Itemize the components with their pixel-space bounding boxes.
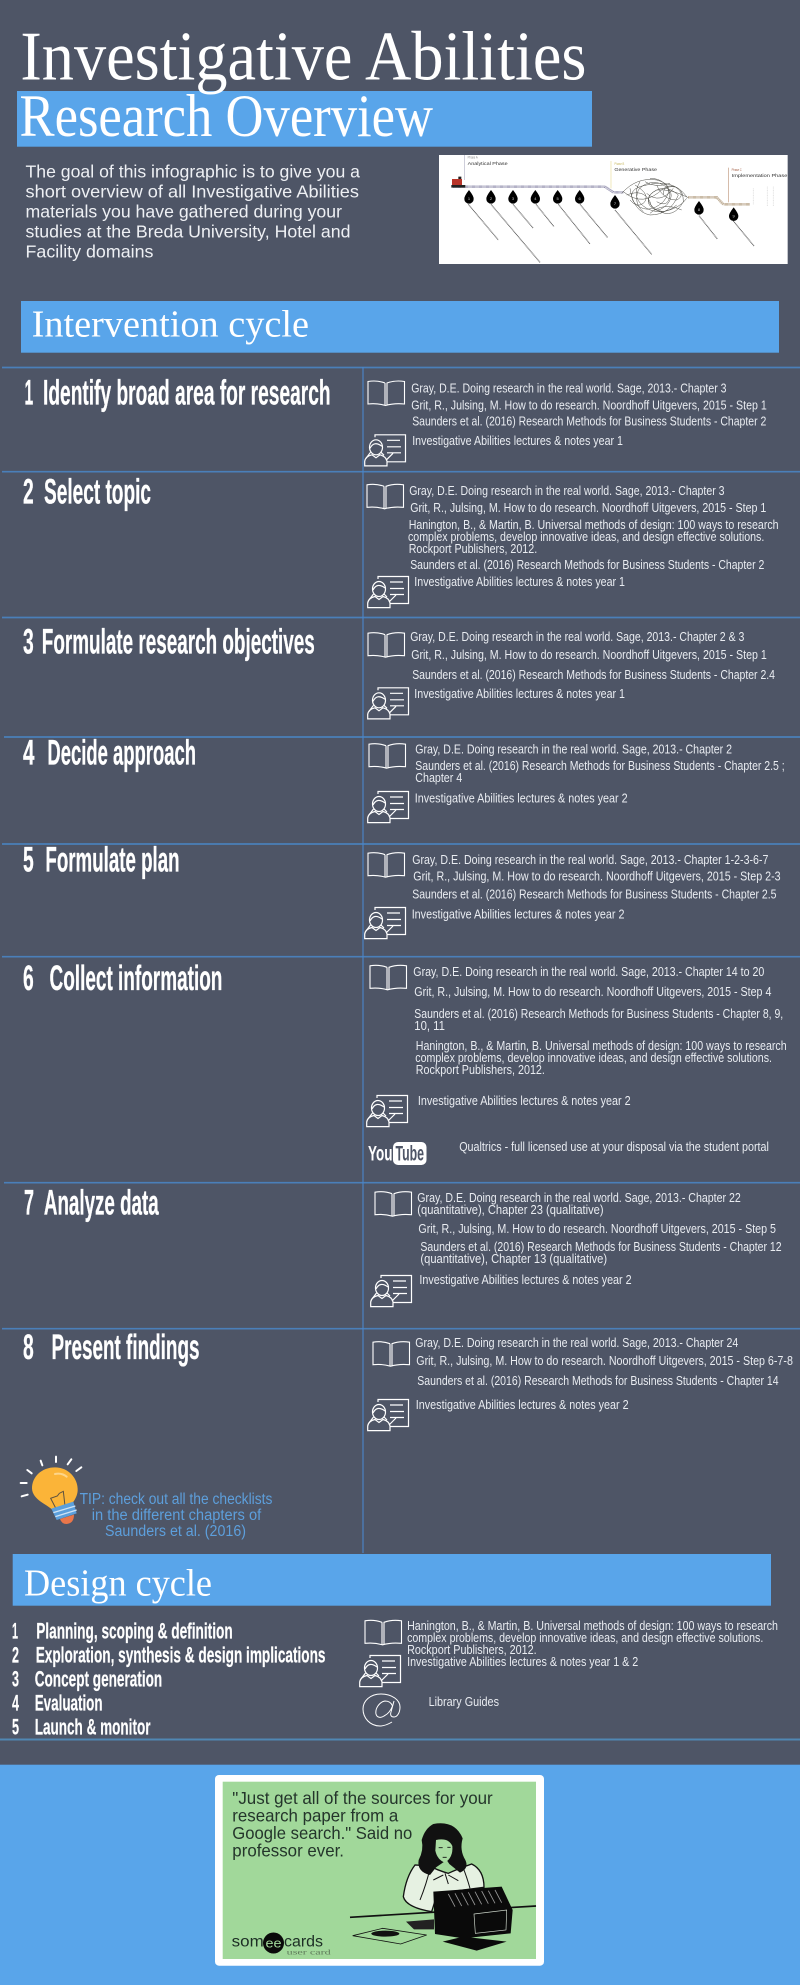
icon: youtube logo: You [368, 1143, 392, 1166]
design cycle steps list: Planning, scoping & definition [36, 1618, 233, 1643]
step 6 heading: 6 [23, 959, 34, 998]
step 5 [23, 841, 781, 939]
step 8 book sources: Gray, D.E. Doing research in the real world. Sage, 2013.- Chapter 24 [415, 1335, 738, 1350]
diagram: design process train track: 6 [579, 196, 582, 201]
step 6 lecture notes: Investigative Abilities lectures & notes year 2 [418, 1093, 631, 1108]
subtitle: Research Overview [20, 83, 434, 149]
step 7 book sources: (quantitative), Chapter 13 (qualitative) [420, 1251, 607, 1266]
icon: book [365, 1620, 402, 1645]
step 1 book sources [411, 380, 767, 428]
someecards logo: ee [266, 1936, 282, 1950]
step 6 book sources: Rockport Publishers, 2012. [416, 1062, 545, 1077]
tip callout: in the different chapters of [92, 1507, 262, 1524]
diagram: design process train track: Phase C [732, 168, 742, 172]
card quote: research paper from a [232, 1805, 399, 1825]
step 3 book sources [410, 629, 775, 682]
step 6 [23, 959, 787, 1166]
diagram: design process train track: 3 [512, 196, 515, 201]
design cycle steps list: Concept generation [35, 1666, 162, 1691]
card quote [232, 1788, 493, 1861]
intro paragraph: The goal of this infographic is to give you a [26, 162, 360, 182]
icon: light bulb [21, 1457, 81, 1524]
intro paragraph: materials you have gathered during your [26, 202, 342, 222]
diagram: design process train track: 8 [698, 207, 701, 212]
step 5 lecture notes: Investigative Abilities lectures & notes year 2 [412, 906, 624, 921]
icon: teacher at board [360, 1656, 400, 1687]
icon: teacher at board [368, 1400, 408, 1431]
design cycle steps list: Evaluation [35, 1690, 103, 1715]
step 2 book sources: Rockport Publishers, 2012. [409, 541, 537, 556]
step 2 heading: Select topic [44, 472, 151, 511]
step 7 heading: Analyze data [44, 1183, 159, 1222]
icon: teacher at board [365, 908, 406, 939]
step 7 book sources: (quantitative), Chapter 23 (qualitative) [417, 1202, 604, 1217]
step 8 heading: 8 [23, 1328, 34, 1367]
intro paragraph: short overview of all Investigative Abilities [26, 182, 359, 202]
icon: youtube logo: Tube [396, 1143, 424, 1166]
step 6 book sources: 10, 11 [414, 1018, 445, 1033]
someecards logo: user card [287, 1948, 331, 1956]
diagram: design process train track: Generative Phase [614, 167, 657, 172]
design cycle steps list: 2 [12, 1642, 19, 1667]
diagram: design process train track: 2 [490, 196, 493, 201]
someecards logo: som [232, 1934, 264, 1951]
step 8 lecture notes: Investigative Abilities lectures & notes year 2 [416, 1397, 629, 1412]
step 4 book sources [415, 741, 785, 785]
design cycle steps list: 5 [12, 1714, 19, 1739]
design cycle steps list: 4 [12, 1690, 19, 1715]
card quote: "Just get all of the sources for your [232, 1788, 493, 1808]
step 4 book sources: Chapter 4 [415, 770, 462, 785]
step 4 heading: 4 [23, 733, 35, 772]
diagram: design process train track: 7 [614, 201, 617, 206]
step 4 heading: Decide approach [47, 733, 196, 772]
icon: teacher at board [368, 792, 408, 823]
step 5 heading: 5 [23, 841, 34, 880]
step 1 heading: Identify broad area for research [43, 373, 331, 412]
design lecture notes: Investigative Abilities lectures & notes year 1 & 2 [407, 1654, 638, 1669]
step 3 heading: 3 [23, 622, 34, 661]
icon: book [370, 965, 406, 990]
someecards logo [232, 1932, 331, 1956]
diagram: design process train track: 5 [557, 196, 560, 201]
icon: teacher at board [371, 1276, 412, 1307]
icon: book [375, 1192, 412, 1216]
diagram: design process train track [439, 155, 788, 264]
step 2 [23, 472, 779, 608]
step 2 heading: 2 [23, 472, 34, 511]
step 1 [24, 373, 767, 466]
header banner: research overview bar [17, 91, 592, 147]
step 7 lecture notes: Investigative Abilities lectures & notes year 2 [419, 1272, 632, 1287]
step 1 lecture notes: Investigative Abilities lectures & notes year 1 [412, 433, 623, 448]
step 7 heading: 7 [24, 1183, 34, 1222]
library guides link: Library Guides [429, 1694, 499, 1709]
section heading: design cycle [13, 1554, 771, 1606]
diagram: design process train track: Phase B [614, 162, 625, 166]
intro paragraph: Facility domains [26, 242, 154, 262]
icon: teacher at board [368, 688, 408, 719]
diagram: design process train track: 4 [534, 196, 537, 201]
icon: book [368, 853, 404, 877]
icon: book [368, 633, 404, 657]
section heading: intervention cycle: Intervention cycle [32, 304, 309, 346]
icon: at sign [363, 1694, 400, 1726]
diagram: design process train track: Phase A [468, 155, 478, 159]
step 7 [24, 1183, 782, 1307]
icon: book [369, 744, 406, 768]
step 2 book sources: Gray, D.E. Doing research in the real world. Sage, 2013.- Chapter 3 [409, 483, 724, 498]
divider line above footer [0, 1738, 800, 1740]
design book source [407, 1618, 778, 1657]
icon: book [368, 381, 404, 406]
design cycle steps list: 3 [12, 1666, 19, 1691]
icon: youtube logo [368, 1142, 426, 1166]
intro paragraph [26, 162, 360, 262]
step 6 book sources [413, 964, 787, 1077]
design cycle steps list: Launch & monitor [35, 1714, 151, 1739]
card quote: professor ever. [232, 1841, 344, 1861]
step 2 book sources [408, 483, 779, 572]
step 1 heading: 1 [24, 373, 33, 412]
step 3 [23, 622, 775, 719]
diagram: design process train track: Analytical Phase [468, 161, 508, 166]
icon: teacher at board [368, 576, 408, 608]
icon: teacher at board [365, 435, 406, 466]
title: Investigative Abilities [20, 18, 586, 95]
step 3 heading: Formulate research objectives [42, 622, 315, 661]
tip callout: Saunders et al. (2016) [105, 1523, 246, 1540]
step 8 [23, 1328, 793, 1431]
intro paragraph: studies at the Breda University, Hotel and [26, 222, 350, 242]
illustration: woman at computer [350, 1823, 536, 1951]
step 4 book sources: Gray, D.E. Doing research in the real world. Sage, 2013.- Chapter 2 [415, 741, 732, 756]
design cycle sources [360, 1618, 778, 1726]
card quote: Google search." Said no [232, 1823, 412, 1843]
footer band [0, 1765, 800, 1985]
design cycle steps list: Exploration, synthesis & design implications [36, 1642, 325, 1667]
diagram: design process train track: 9 [733, 213, 736, 218]
icon: book [367, 484, 404, 509]
design cycle steps list [12, 1618, 326, 1739]
step 8 book sources [415, 1335, 793, 1388]
design cycle steps list: 1 [12, 1618, 18, 1643]
step 7 book sources [417, 1190, 782, 1266]
design book source: Rockport Publishers, 2012. [407, 1642, 537, 1657]
step 4 [23, 733, 785, 823]
icon: book [373, 1342, 410, 1366]
step 5 heading: Formulate plan [45, 841, 180, 880]
tip callout [80, 1491, 273, 1540]
divider lines of the cycle table [2, 367, 800, 1553]
icon: teacher at board [367, 1096, 408, 1127]
step 2 lecture notes: Investigative Abilities lectures & notes year 1 [414, 574, 625, 589]
diagram: design process train track: Implementation Phase [732, 173, 788, 178]
section heading: design cycle: Design cycle [24, 1563, 212, 1605]
diagram: design process train track: 1 [468, 196, 471, 201]
step 3 lecture notes: Investigative Abilities lectures & notes year 1 [414, 686, 625, 701]
step 1 book sources: Gray, D.E. Doing research in the real world. Sage, 2013.- Chapter 3 [411, 380, 726, 395]
step 6 heading: Collect information [50, 959, 222, 998]
meme card [215, 1775, 544, 1966]
step 5 book sources [412, 852, 781, 901]
section heading: intervention cycle [21, 301, 779, 353]
tip callout: TIP: check out all the checklists [80, 1491, 273, 1508]
someecards logo: cards [284, 1934, 323, 1951]
step 8 heading: Present findings [52, 1328, 200, 1367]
step 4 lecture notes: Investigative Abilities lectures & notes year 2 [415, 790, 628, 805]
